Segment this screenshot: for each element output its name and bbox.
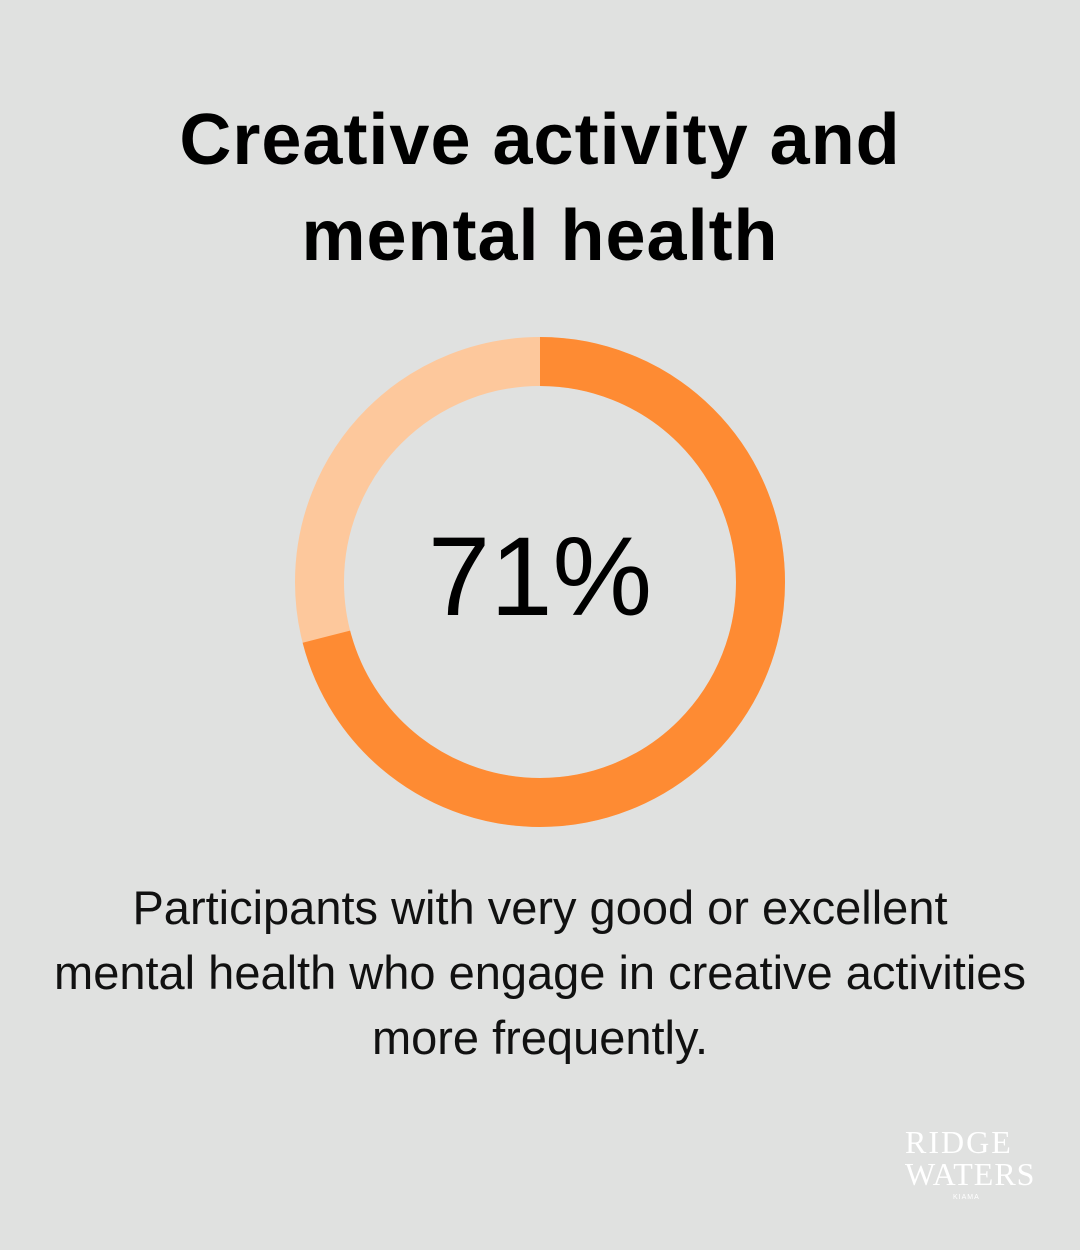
- title: mental health: [301, 196, 779, 276]
- description: [54, 881, 1026, 1064]
- description: Participants with very good or excellent: [132, 881, 948, 934]
- donut background ring: [320, 362, 760, 802]
- title: Creative activity and: [179, 100, 901, 180]
- logo: [905, 1124, 1035, 1201]
- logo: RIDGE: [905, 1124, 1013, 1160]
- logo: KIAMA: [953, 1194, 980, 1201]
- percentage label: 71%: [428, 514, 652, 639]
- title: [179, 100, 901, 276]
- description: more frequently.: [372, 1011, 708, 1064]
- donut value arc 71%: [320, 362, 760, 802]
- description: mental health who engage in creative activities: [54, 946, 1026, 999]
- logo: WATERS: [905, 1156, 1035, 1192]
